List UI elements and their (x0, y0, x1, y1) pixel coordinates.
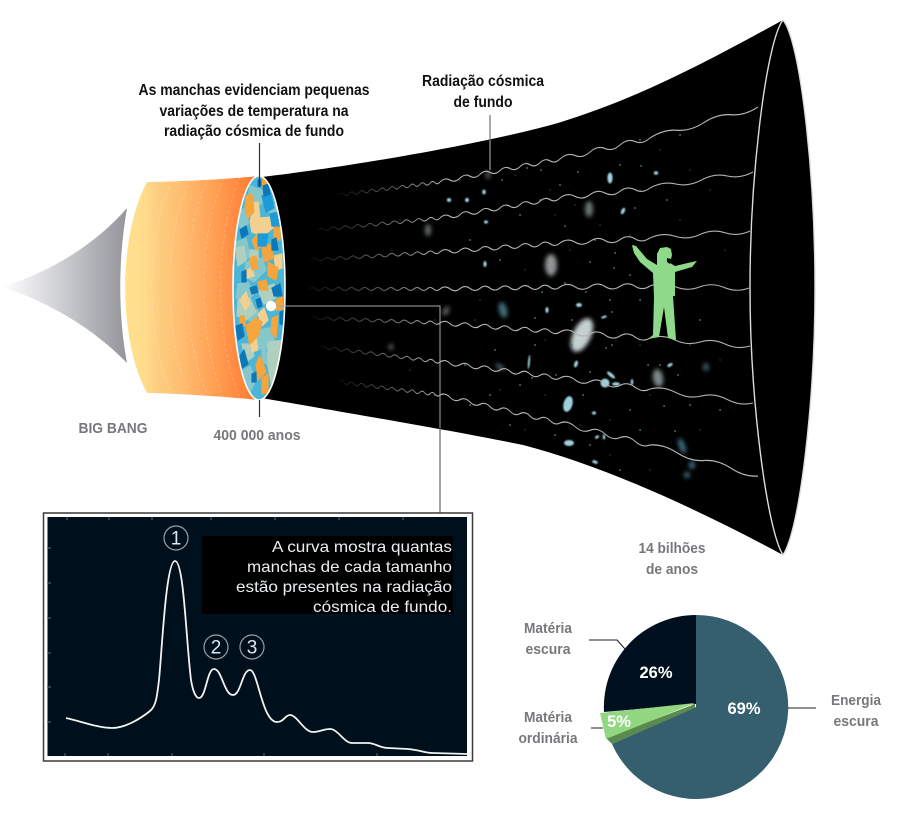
CMB disc with temperature patches (233, 176, 286, 400)
connector: patches label stem (258, 143, 260, 417)
label: ordinary matter: ordinária (518, 730, 578, 747)
peak marker 2: 2 (211, 638, 221, 658)
label: 400 000 anos: 400 000 anos (214, 427, 300, 444)
label: dark matter: Matéria (524, 620, 573, 637)
caption box (202, 536, 453, 616)
pie chart: composition of universe: 5% (607, 713, 631, 731)
heading: patches text (138, 82, 370, 140)
heading: patches text: radiação cósmica de fundo (164, 123, 344, 140)
pie chart: composition of universe (600, 615, 788, 799)
connector: disc to curve panel (266, 301, 440, 513)
label: dark matter: escura (526, 641, 571, 658)
heading: cosmic radiation: de fundo (454, 94, 512, 111)
heading: cosmic radiation: Radiação cósmica (422, 73, 544, 90)
pie chart: composition of universe: 26% (639, 664, 673, 682)
connector: radiation label (489, 115, 491, 140)
curve (66, 561, 467, 754)
caption box: cósmica de fundo. (313, 599, 452, 616)
peak marker 3: 3 (247, 638, 257, 658)
label: big bang: BIG BANG (78, 420, 148, 437)
caption box: A curva mostra quantas (272, 539, 452, 556)
caption box: manchas de cada tamanho (247, 559, 452, 576)
wave lines: cosmic background radiation (309, 104, 758, 478)
pie chart: composition of universe: 69% (727, 700, 761, 718)
label: 14 billion years (638, 540, 706, 578)
person silhouette (632, 245, 697, 340)
peak marker 2 (204, 635, 228, 659)
peak marker 3 (240, 635, 264, 659)
orange cylinder: early universe (125, 176, 259, 400)
label: ordinary matter: Matéria (524, 709, 573, 726)
slice: dark energy (612, 615, 788, 799)
galaxies and stars (388, 135, 725, 478)
panel: power spectrum curve (44, 513, 472, 761)
connector: radiation label lower part (489, 140, 491, 170)
black funnel: expanding universe (262, 20, 783, 555)
heading: cosmic radiation (422, 73, 544, 111)
leader lines for pie (589, 640, 816, 728)
heading: patches text: variações de temperatura na (160, 103, 349, 120)
label: dark energy: escura (834, 713, 879, 730)
slice: dark matter (604, 615, 696, 712)
label: 14 billion years: de anos (646, 561, 698, 578)
label: dark matter (524, 620, 573, 658)
label: dark energy (831, 692, 882, 730)
slice: ordinary matter (600, 703, 695, 744)
peak marker 1: 1 (171, 528, 181, 550)
peak marker 1 (164, 526, 188, 550)
heading: patches text: As manchas evidenciam pequenas (138, 82, 370, 99)
label: 14 billion years: 14 bilhões (638, 540, 706, 557)
cone: big bang (2, 208, 127, 363)
label: ordinary matter (518, 709, 578, 747)
caption box: estão presentes na radiação (236, 579, 452, 596)
right end ellipse of funnel (750, 20, 815, 555)
label: dark energy: Energia (831, 692, 882, 709)
